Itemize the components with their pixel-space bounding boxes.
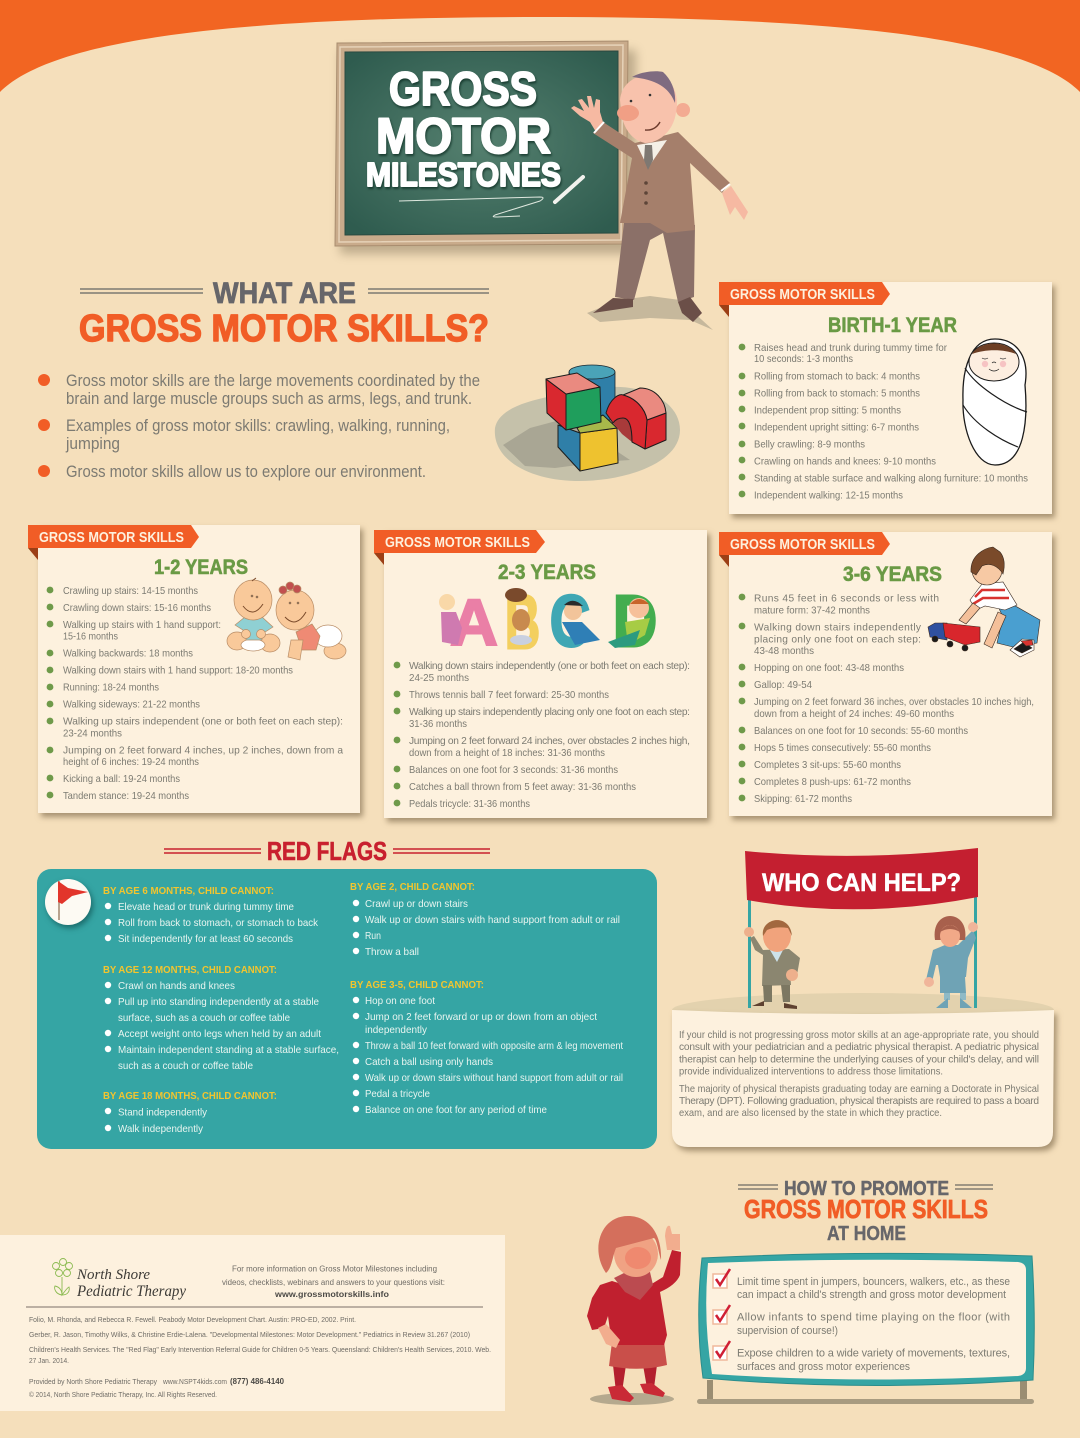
figure: man	[744, 920, 800, 1009]
milestones list: Runs 45 feet in 6 seconds or less with	[754, 594, 939, 604]
left column: Accept weight onto legs when held by an adult	[118, 1029, 321, 1040]
milestones list	[739, 343, 1028, 502]
icon: swaddled baby	[963, 339, 1027, 465]
right column: Crawl up or down stairs	[365, 899, 468, 910]
milestones list: Independent upright sitting: 6-7 months	[754, 422, 919, 434]
milestones list: Running: 18-24 months	[63, 682, 159, 694]
right column: Throw a ball	[365, 947, 419, 958]
left column: Stand independently	[118, 1108, 208, 1118]
milestones list: 10 seconds: 1-3 months	[754, 354, 853, 365]
left column: Maintain independent standing at a stable surface,	[118, 1045, 339, 1056]
tip list text: Expose children to a wide variety of movements, textures,	[737, 1348, 1010, 1360]
left column: surface, such as a couch or coffee table	[118, 1013, 290, 1024]
more information text: videos, checklists, webinars and answers to your questions visit:	[222, 1278, 445, 1287]
left column: such as a couch or coffee table	[118, 1061, 253, 1072]
references: Folio, M. Rhonda, and Rebecca R. Fewell. Peabody Motor Development Chart. Austin: PRO-ED, 2002. Print.	[29, 1315, 356, 1324]
milestones list: Independent walking: 12-15 months	[754, 490, 903, 502]
milestones list: Hops 5 times consecutively: 55-60 months	[754, 743, 931, 754]
figure: woman	[924, 916, 978, 1008]
milestones list	[47, 586, 343, 802]
ribbon	[719, 282, 890, 317]
heading: how to promote: HOW TO PROMOTE	[784, 1177, 949, 1200]
milestones list: Walking up stairs independently placing only one foot on each step:	[409, 707, 690, 718]
ribbon: GROSS MOTOR SKILLS	[39, 530, 184, 546]
heading: red flags	[164, 838, 490, 866]
icon: red flag	[45, 879, 91, 925]
left column: Sit independently for at least 60 seconds	[118, 934, 293, 945]
milestones list: 31-36 months	[409, 719, 467, 730]
provider and copyright: www.NSPT4kids.com	[162, 1377, 227, 1386]
milestones list: down from a height of 18 inches: 31-36 months	[409, 748, 605, 759]
references	[29, 1315, 491, 1365]
milestones list: Completes 8 push-ups: 61-72 months	[754, 777, 911, 788]
text card: therapist can help to determine the underlying causes of your child's delay, and will	[679, 1054, 1039, 1066]
left column: Walk independently	[118, 1124, 204, 1135]
icon: boy with toy truck	[928, 547, 1040, 657]
intro bullet list: Examples of gross motor skills: crawling, walking, running,	[66, 416, 450, 435]
heading: how to promote	[738, 1177, 993, 1245]
illustration: babies on ABCD letters	[439, 580, 657, 665]
ribbon	[374, 530, 545, 565]
icon: toy blocks	[495, 365, 680, 481]
text card: consult with your pediatrician and a pediatric physical therapist. A pediatric physical	[679, 1042, 1039, 1053]
banner	[745, 848, 978, 909]
checkboxes	[713, 1269, 730, 1360]
illustration: babies on ABCD letters: D	[613, 582, 657, 662]
text card: exam, and are also licensed by the state in which they practice.	[679, 1108, 942, 1119]
title text	[366, 62, 561, 194]
right column: Run	[365, 931, 381, 942]
provider and copyright: (877) 486-4140	[230, 1377, 285, 1386]
panel: 2-3 years	[374, 530, 707, 818]
right column: independently	[365, 1025, 428, 1036]
milestones list: Belly crawling: 8-9 months	[754, 440, 865, 450]
milestones list	[739, 594, 1034, 805]
milestones list: Completes 3 sit-ups: 55-60 months	[754, 760, 901, 771]
text card: provide individualized interventions to address those limitations.	[679, 1066, 943, 1078]
milestones list: Crawling on hands and knees: 9-10 months	[754, 456, 936, 468]
right column: BY AGE 2, CHILD CANNOT:	[350, 882, 475, 893]
banner poles	[748, 895, 977, 1008]
milestones list: Jumping on 2 feet forward 24 inches, over obstacles 2 inches high,	[409, 736, 690, 747]
provider and copyright: Provided by North Shore Pediatric Therapy	[29, 1377, 157, 1386]
left column	[103, 886, 339, 1135]
milestones list: Standing at stable surface and walking along furniture: 10 months	[754, 474, 1028, 484]
tip list text	[737, 1276, 1010, 1373]
tip list text: can impact a child's strength and gross motor development	[737, 1289, 1006, 1301]
chalkboard with title	[335, 41, 636, 254]
references: Children's Health Services. The "Red Flag" Early Intervention Referral Guide for Children 0-5 Years. Queensland: Children's Health Services, 2010. Web.	[29, 1345, 491, 1354]
milestones list: Throws tennis ball 7 feet forward: 25-30 months	[409, 690, 609, 701]
logo: north shore pediatric therapy	[52, 1258, 187, 1300]
right column: Walk up or down stairs without hand support from adult or rail	[365, 1073, 623, 1084]
left column: BY AGE 18 MONTHS, CHILD CANNOT:	[103, 1091, 277, 1102]
top orange band	[0, 0, 1080, 92]
milestones list: Pedals tricycle: 31-36 months	[409, 799, 530, 810]
panel: 3-6 years	[719, 532, 1052, 816]
milestones list: Walking up stairs independent (one or both feet on each step):	[63, 716, 343, 728]
milestones list: Balances on one foot for 3 seconds: 31-36 months	[409, 765, 618, 776]
right column: BY AGE 3-5, CHILD CANNOT:	[350, 980, 484, 991]
milestones list: Walking backwards: 18 months	[63, 648, 193, 660]
references: Gerber, R. Jason, Timothy Wilks, & Christine Erdie-Lalena. "Developmental Milestones: Motor Development." Pediatrics in Review 31.267 (2010)	[29, 1330, 470, 1339]
provider and copyright	[29, 1377, 285, 1399]
heading: what are gross motor skills: WHAT ARE	[213, 277, 356, 310]
ribbon: GROSS MOTOR SKILLS	[730, 287, 875, 303]
right column: Balance on one foot for any period of time	[365, 1105, 547, 1116]
right column	[350, 882, 623, 1116]
milestones list: Walking down stairs independently (one or both feet on each step):	[409, 661, 690, 672]
milestones list	[394, 661, 690, 810]
right column: Throw a ball 10 feet forward with opposite arm & leg movement	[365, 1041, 623, 1052]
right column: Catch a ball using only hands	[365, 1057, 493, 1068]
milestones list: 23-24 months	[63, 728, 122, 740]
heading: 1-2 YEARS	[154, 555, 248, 579]
milestones list: mature form: 37-42 months	[754, 606, 870, 616]
chalk underline and stick	[399, 177, 583, 217]
milestones list: Rolling from back to stomach: 5 months	[754, 388, 920, 400]
milestones list: Raises head and trunk during tummy time for	[754, 343, 948, 354]
intro bullet list: Gross motor skills are the large movements coordinated by the	[66, 371, 480, 390]
heading: 2-3 YEARS	[498, 560, 596, 584]
heading: what are gross motor skills	[79, 277, 489, 350]
milestones list: Walking down stairs independently	[754, 622, 922, 634]
footer panel	[0, 1235, 505, 1411]
heading: BIRTH-1 YEAR	[828, 313, 957, 337]
ribbon	[719, 532, 890, 567]
title text: GROSS	[389, 62, 537, 115]
milestones list: Balances on one foot for 10 seconds: 55-60 months	[754, 726, 968, 737]
more information text: www.grossmotorskills.info	[274, 1289, 389, 1299]
illustration: woman pointing up	[587, 1216, 681, 1405]
heading: 3-6 YEARS	[843, 562, 942, 586]
milestones list: Jumping on 2 feet forward 4 inches, up 2 inches, down from a	[63, 746, 343, 756]
right column: Pedal a tricycle	[365, 1089, 430, 1100]
intro bullet list: Gross motor skills allow us to explore our environment.	[66, 462, 426, 481]
right column: Walk up or down stairs with hand support from adult or rail	[365, 915, 620, 926]
left column: Pull up into standing independently at a stable	[118, 997, 319, 1008]
milestones list: Crawling down stairs: 15-16 months	[63, 603, 211, 614]
ribbon	[28, 525, 199, 560]
panel: 1-2 years	[28, 525, 360, 813]
tip list text: supervision of course!)	[737, 1325, 838, 1337]
provider and copyright: © 2014, North Shore Pediatric Therapy, Inc. All Rights Reserved.	[29, 1390, 217, 1399]
text card: If your child is not progressing gross motor skills at an age-appropriate rate, you should	[679, 1030, 1039, 1041]
milestones list: Hopping on one foot: 43-48 months	[754, 663, 904, 674]
milestones list: height of 6 inches: 19-24 months	[63, 757, 199, 768]
more information text	[222, 1264, 445, 1299]
title text: MILESTONES	[366, 157, 561, 194]
text card: Therapy (DPT). Following graduation, physical therapists are required to pass a board	[679, 1096, 1039, 1107]
left column: BY AGE 6 MONTHS, CHILD CANNOT:	[103, 886, 274, 897]
panel: red flags	[37, 869, 657, 1149]
milestones list: Walking down stairs with 1 hand support: 18-20 months	[63, 666, 293, 676]
references: 27 Jan. 2014.	[29, 1356, 69, 1365]
icon: two babies	[227, 578, 346, 660]
illustration: babies on ABCD letters: B	[505, 580, 540, 665]
panel: birth to 1 year	[719, 282, 1052, 514]
left column: Roll from back to stomach, or stomach to back	[118, 918, 319, 929]
milestones list: Gallop: 49-54	[754, 680, 812, 691]
illustration: babies on ABCD letters: C	[550, 582, 590, 662]
milestones list: Catches a ball thrown from 5 feet away: 31-36 months	[409, 782, 636, 793]
milestones list: Tandem stance: 19-24 months	[63, 791, 189, 802]
logo: north shore pediatric therapy: North Shore	[76, 1267, 150, 1283]
milestones list: Skipping: 61-72 months	[754, 794, 852, 805]
left column: BY AGE 12 MONTHS, CHILD CANNOT:	[103, 965, 277, 976]
milestones list: Jumping on 2 feet forward 36 inches, over obstacles 10 inches high,	[754, 697, 1034, 708]
panel: who can help	[672, 848, 1054, 1147]
tip list text: surfaces and gross motor experiences	[737, 1361, 910, 1373]
right column: Jump on 2 feet forward or up or down from an object	[365, 1012, 597, 1023]
logo: north shore pediatric therapy: Pediatric Therapy	[76, 1283, 187, 1300]
heading: red flags: RED FLAGS	[267, 838, 387, 866]
milestones list: Independent prop sitting: 5 months	[754, 406, 901, 416]
heading: how to promote: AT HOME	[827, 1223, 906, 1245]
board posts and ground	[707, 1380, 1027, 1402]
right column: Hop on one foot	[365, 996, 435, 1007]
ribbon: GROSS MOTOR SKILLS	[730, 537, 875, 553]
milestones list: 24-25 months	[409, 673, 469, 684]
intro bullet list: brain and large muscle groups such as arms, legs, and trunk.	[66, 389, 472, 408]
ribbon: GROSS MOTOR SKILLS	[385, 535, 530, 551]
milestones list: 15-16 months	[63, 632, 118, 642]
tip list text: Allow infants to spend time playing on the floor (with	[737, 1312, 1010, 1324]
left column: Elevate head or trunk during tummy time	[118, 902, 294, 913]
heading: how to promote: GROSS MOTOR SKILLS	[744, 1194, 988, 1224]
more information text: For more information on Gross Motor Milestones including	[232, 1264, 437, 1274]
teacher illustration	[571, 71, 748, 330]
milestones list: Kicking a ball: 19-24 months	[63, 774, 180, 785]
intro bullet list: jumping	[65, 434, 120, 453]
milestones list: down from a height of 24 inches: 49-60 months	[754, 709, 954, 720]
banner: WHO CAN HELP?	[762, 869, 961, 897]
text card	[672, 1010, 1054, 1147]
illustration: babies on ABCD letters: A	[450, 585, 498, 659]
platform	[672, 993, 1054, 1027]
milestones list: placing only one foot on each step:	[754, 634, 921, 646]
milestones list: Walking up stairs with 1 hand support:	[63, 620, 221, 631]
intro bullet list	[38, 371, 480, 481]
board frame	[699, 1253, 1034, 1386]
heading: what are gross motor skills: GROSS MOTOR SKILLS?	[79, 308, 489, 350]
milestones list: 43-48 months	[754, 646, 814, 657]
milestones list: Walking sideways: 21-22 months	[63, 700, 200, 710]
tip list text: Limit time spent in jumpers, bouncers, walkers, etc., as these	[737, 1276, 1010, 1288]
milestones list: Crawling up stairs: 14-15 months	[63, 586, 198, 597]
title text: MOTOR	[376, 108, 551, 164]
milestones list: Rolling from stomach to back: 4 months	[754, 372, 920, 382]
text card: The majority of physical therapists graduating today are earning a Doctorate in Physical	[679, 1084, 1039, 1095]
panel: how to promote checklist board	[697, 1253, 1034, 1404]
left column: Crawl on hands and knees	[118, 981, 235, 992]
